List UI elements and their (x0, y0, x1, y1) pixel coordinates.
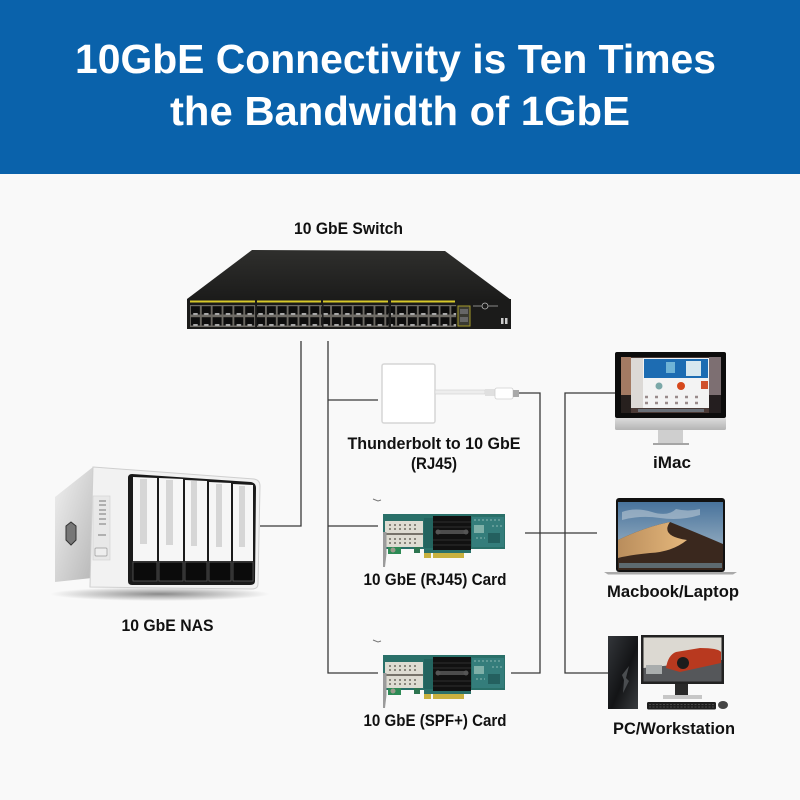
adapter label (348, 434, 520, 473)
icon: SFP+ card (373, 640, 505, 708)
adapter label: Thunderbolt to 10 GbE (348, 434, 520, 453)
title: 10GbE Connectivity is Ten Times (75, 36, 716, 82)
PC label: PC/Workstation (613, 719, 735, 738)
header banner (0, 0, 800, 174)
RJ45 card label: 10 GbE (RJ45) Card (364, 570, 506, 589)
logo (66, 522, 76, 545)
drive trays (133, 477, 253, 581)
icon: NAS (50, 467, 270, 601)
icon: laptop (604, 498, 737, 574)
connection lines (260, 341, 615, 673)
iMac label: iMac (653, 453, 691, 472)
title: the Bandwidth of 1GbE (170, 88, 630, 134)
NAS label: 10 GbE NAS (122, 616, 214, 635)
title (75, 36, 716, 134)
laptop label: Macbook/Laptop (607, 582, 739, 601)
icon: 10 GbE switch (187, 250, 511, 329)
adapter label: (RJ45) (411, 454, 457, 473)
switch label: 10 GbE Switch (294, 219, 403, 238)
icon: PC workstation (608, 635, 728, 710)
SFP+ card label: 10 GbE (SPF+) Card (364, 711, 506, 730)
icon: iMac (615, 352, 726, 445)
status panel (93, 496, 110, 560)
icon: Thunderbolt adapter (382, 364, 519, 423)
icon: RJ45 card (373, 499, 505, 567)
